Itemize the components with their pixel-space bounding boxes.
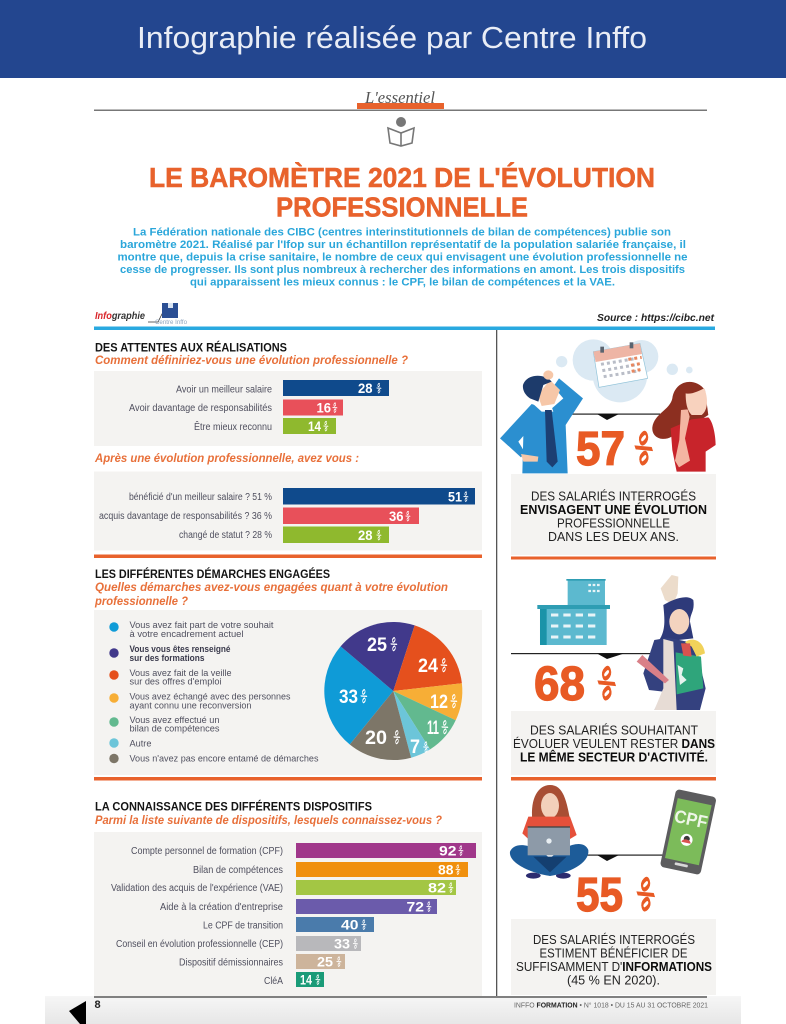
footer band [45,996,741,1024]
pie chart: % [391,727,403,748]
title [149,162,655,222]
text box: ESTIMENT BÉNÉFICIER DE [540,946,688,960]
bar chart: dispositifs: % [335,954,343,969]
bar chart: definition: Être mieux reconnu [194,420,272,433]
illustration: thinking woman [652,382,716,472]
text box [511,711,716,775]
Infographie tag and logo [95,303,188,326]
bar chart: dispositifs: Validation des acquis de l'expérience (VAE) [111,883,283,894]
bar chart: dispositifs: CléA [264,976,283,987]
text box: LE MÊME SECTEUR D'ACTIVITÉ. [520,750,708,764]
column divider [496,330,497,997]
illustration: calendar thought bubble [556,339,693,402]
bar chart: dispositifs: Compte personnel de formation (CPF) [131,846,283,857]
legend: Vous vous êtes renseigné [130,644,230,655]
big number: 55 % [576,869,659,922]
pie chart: 7 [410,737,420,758]
intro paragraph: montre que, depuis la crise sanitaire, le nombre de ceux qui envisagent une évolution professionnelle ne [118,252,688,264]
text box: DES SALARIÉS INTERROGÉS [533,932,695,947]
bar chart: dispositifs: % [360,917,368,932]
big number: 55 %: 55 [576,869,623,922]
illustration: woman with laptop [510,785,588,879]
text box: DES SALARIÉS INTERROGÉS [531,488,696,504]
bar chart: after evolution [94,472,482,550]
bar chart: dispositifs: % [454,862,462,877]
pie chart: % [388,634,400,655]
connector line with notch [585,854,670,861]
bar chart: definition: 14 [308,419,321,434]
text box: (45 % EN 2020). [567,972,660,988]
bar chart: after evolution: % [404,509,412,524]
question 2: Après une évolution professionnelle, avez vous : [94,451,359,465]
legend: sur des offres d'emploi [130,676,222,688]
illustration: phone with CPF: CPF [673,806,709,833]
illustration: woman with grocery bag [637,575,706,710]
pie chart [324,622,462,760]
bar chart: definition: % [375,381,383,396]
stat panel: 68 % [511,575,716,775]
intro paragraph: La Fédération nationale des CIBC (centres interinstitutionnels de bilan de compétences) publie son [133,226,671,238]
bar chart: definition: 28 [358,381,373,396]
Infographie tag and logo: Infographie [95,310,145,322]
bar chart: dispositifs: 82 [428,880,446,896]
bar chart: dispositifs: % [314,972,322,987]
pie chart: 25 [367,635,387,656]
bar chart: dispositifs: 14 [300,972,312,988]
bar chart: dispositifs: 92 [439,844,456,858]
pie chart: 12 [430,692,448,713]
big number: 57 % [576,423,657,476]
illustration: thinking man [500,370,583,473]
footer: 8 [94,999,101,1011]
bar chart: after evolution: 51 [448,490,462,504]
illustration: building [537,579,610,645]
bar chart: dispositifs: % [351,936,360,951]
bar chart: definition: 16 [316,400,331,416]
legend [109,620,319,764]
pie chart: % [448,691,460,712]
question: Quelles démarches avez-vous engagées quant à votre évolution [95,580,448,594]
heading: LES DIFFÉRENTES DÉMARCHES ENGAGÉES [95,566,330,581]
pie chart: 20 [365,728,387,749]
legend: sur des formations [130,653,204,664]
bar chart: after evolution: 36 [389,509,404,524]
bar chart: dispositifs: Aide à la création d'entreprise [160,902,283,913]
text box: ÉVOLUER VEULENT RESTER DANS [513,736,715,751]
legend: à votre encadrement actuel [130,629,244,640]
big number: 57 %: % [629,425,657,473]
text box: ENVISAGENT UNE ÉVOLUTION [520,502,707,517]
legend: Vous avez fait de la veille [130,668,232,679]
bar chart: after evolution: changé de statut ? 28 % [179,530,272,541]
footer: INFFO FORMATION • N° 1018 • DU 15 AU 31 OCTOBRE 2021 [514,1000,708,1010]
big number: 55 %: % [631,871,659,919]
connector line with notch [511,653,656,659]
bar chart: dispositifs: 40 [341,918,358,932]
legend: Vous avez échangé avec des personnes [130,692,291,702]
bar chart: dispositifs: 72 [406,900,424,914]
stat panel: 55 % [510,785,717,995]
bar chart: after evolution: % [462,489,470,504]
bar chart: after evolution: 28 [358,528,373,543]
bar chart: definition: % [322,419,330,434]
pie chart: 33 [339,687,358,708]
intro paragraph: qui apparaissent les mieux connus : le CPF, le bilan de compétences et la VAE. [190,276,615,288]
rubric tag: L'essentiel: L'essentiel [364,88,435,107]
text box: DES SALARIÉS SOUHAITANT [530,722,698,738]
pie chart: % [358,686,370,707]
footer [69,996,708,1024]
big number: 68 %: % [592,660,620,708]
title: PROFESSIONNELLE [276,192,528,222]
bar chart: dispositifs: % [425,899,433,914]
legend: Vous avez fait part de votre souhait [130,620,274,631]
bar chart: dispositifs: Conseil en évolution professionnelle (CEP) [116,939,283,950]
bar chart: after evolution: acquis davantage de responsabilités ? 36 % [99,511,272,522]
rubric tag: L'essentiel [94,88,707,111]
pie chart: 11 [427,718,439,739]
question: Parmi la liste suivante de dispositifs, lesquels connaissez-vous ? [95,813,443,827]
text box [511,474,716,555]
legend: Vous avez effectué un [130,715,220,726]
source: Source : https://cibc.net [597,312,714,324]
legend: Vous n'avez pas encore entamé de démarches [130,754,319,764]
bar chart: dispositifs: Dispositif démissionnaires [179,958,283,968]
bar chart: dispositifs [94,832,482,996]
Infographie tag and logo: Centre Inffo [155,320,188,326]
legend: bilan de compétences [130,724,220,734]
title: LE BAROMÈTRE 2021 DE L'ÉVOLUTION [149,162,655,193]
question: professionnelle ? [94,594,189,608]
pie chart: % [438,655,450,676]
bar chart: after evolution: % [375,528,383,543]
bar chart: dispositifs: Bilan de compétences [193,865,283,876]
panel: les différentes démarches engagées [94,566,482,775]
big number: 68 % [534,658,620,711]
heading: LA CONNAISSANCE DES DIFFÉRENTS DISPOSITIFS [95,798,372,814]
text box: DANS LES DEUX ANS. [548,529,679,544]
bar chart: definition: Avoir un meilleur salaire [176,384,272,396]
bar chart: definition: Avoir davantage de responsabilités [129,403,272,414]
grey background [94,610,482,775]
big number: 68 %: 68 [534,658,585,711]
question 1: Comment définiriez-vous une évolution professionnelle ? [95,353,409,367]
bar chart: dispositifs: Le CPF de transition [203,920,283,932]
intro paragraph [118,226,688,288]
pie chart: 24 [418,656,438,677]
header banner [0,0,786,78]
legend: Autre [130,738,152,750]
heading: DES ATTENTES AUX RÉALISATIONS [95,340,287,354]
text box: PROFESSIONNELLE [557,516,670,530]
intro paragraph: cesse de progresser. Ils sont plus nombreux à rechercher des informations en amont. Les trois dispositifs [120,264,685,276]
connector line with notch [570,414,660,420]
bar chart: definition: % [331,400,339,415]
header banner: Infographie réalisée par Centre Inffo [137,20,647,55]
bar chart: dispositifs: 88 [438,862,454,878]
blue separator [94,326,715,330]
legend: ayant connu une reconversion [130,700,252,712]
text box [511,919,716,995]
bar chart: definition [94,371,482,446]
bar chart: dispositifs: 25 [317,954,334,970]
intro paragraph: baromètre 2021. Réalisé par l'Ifop sur un échantillon représentatif de la population salariée française, il [120,239,686,251]
bar chart: dispositifs: 33 [334,936,351,952]
stat panel: 57 % [500,339,716,555]
illustration: phone with CPF [660,789,717,875]
big number: 57 %: 57 [576,423,625,476]
panel: des attentes aux réalisations [94,340,482,550]
text box: SUFFISAMMENT D'INFORMATIONS [516,959,712,974]
question [94,580,448,608]
bar chart: dispositifs: % [447,880,455,895]
pie chart: % [439,717,451,738]
bar chart: after evolution: bénéficié d'un meilleur salaire ? 51 % [129,492,272,503]
pie chart: % [421,739,430,756]
bar chart: dispositifs: % [457,843,465,858]
panel: la connaissance des différents dispositifs [94,798,482,996]
icon: person reading book [388,117,414,146]
